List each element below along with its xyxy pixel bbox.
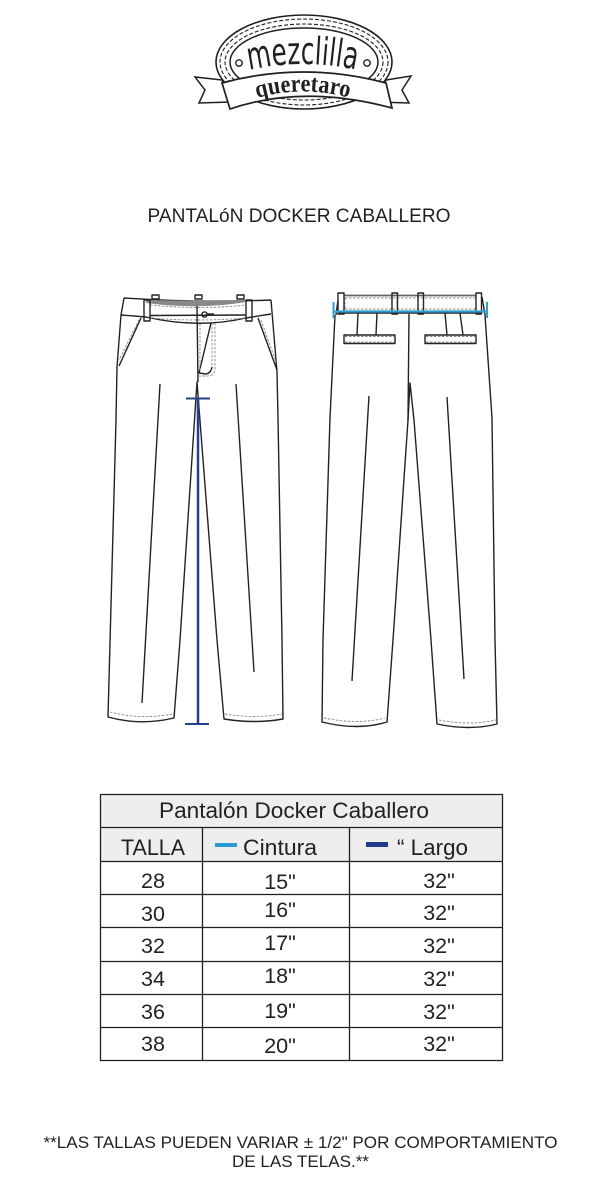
row 30: 32" bbox=[423, 901, 455, 925]
row 38: 32" bbox=[423, 1032, 455, 1056]
row 28: 15" bbox=[264, 870, 296, 894]
waist measure: light blue line bbox=[333, 302, 487, 318]
front pants diagram bbox=[108, 295, 283, 722]
logo: mezclilla queretaro: mezclilla bbox=[248, 36, 356, 70]
row 36 bbox=[141, 999, 455, 1024]
row 30: 30 bbox=[141, 902, 165, 926]
row 30 bbox=[141, 898, 455, 926]
row 34: 32" bbox=[423, 967, 455, 991]
footnote: DE LAS TELAS.** bbox=[232, 1153, 370, 1171]
row 38: 38 bbox=[141, 1032, 165, 1056]
row 28: 32" bbox=[423, 869, 455, 893]
column header: largo: “ Largo bbox=[397, 835, 468, 860]
row 32: 32" bbox=[423, 934, 455, 958]
row 30: 16" bbox=[264, 898, 296, 922]
row 38: 20" bbox=[264, 1034, 296, 1058]
footnote: **LAS TALLAS PUEDEN VARIAR ± 1/2" POR COMPORTAMIENTO bbox=[44, 1134, 558, 1152]
outline: front pants bbox=[108, 298, 283, 722]
size table bbox=[100, 794, 502, 1060]
row 32: 32 bbox=[141, 934, 165, 958]
row 36: 19" bbox=[264, 999, 296, 1023]
column header: cintura bbox=[215, 835, 318, 860]
row 34: 18" bbox=[264, 964, 296, 988]
row 28 bbox=[141, 869, 455, 894]
row 34 bbox=[141, 964, 455, 991]
logo: mezclilla queretaro: queretaro bbox=[256, 78, 350, 102]
row 34: 34 bbox=[141, 967, 165, 991]
table header background bbox=[100, 794, 502, 862]
row 36: 32" bbox=[423, 1000, 455, 1024]
row 38 bbox=[141, 1032, 455, 1058]
row 32 bbox=[141, 931, 455, 958]
column header: talla: TALLA bbox=[121, 835, 185, 860]
column header: largo bbox=[366, 835, 468, 860]
row 28: 28 bbox=[141, 869, 165, 893]
row 32: 17" bbox=[264, 931, 296, 955]
row 36: 36 bbox=[141, 1000, 165, 1024]
title: PANTALóN DOCKER CABALLERO bbox=[148, 205, 450, 227]
outline: back pants bbox=[322, 297, 497, 728]
back pants diagram bbox=[322, 293, 497, 728]
column header: cintura: Cintura bbox=[243, 835, 318, 860]
table title: Pantalón Docker Caballero bbox=[159, 798, 429, 823]
length measure: dark blue line bbox=[185, 398, 210, 724]
logo: mezclilla queretaro bbox=[193, 14, 412, 110]
